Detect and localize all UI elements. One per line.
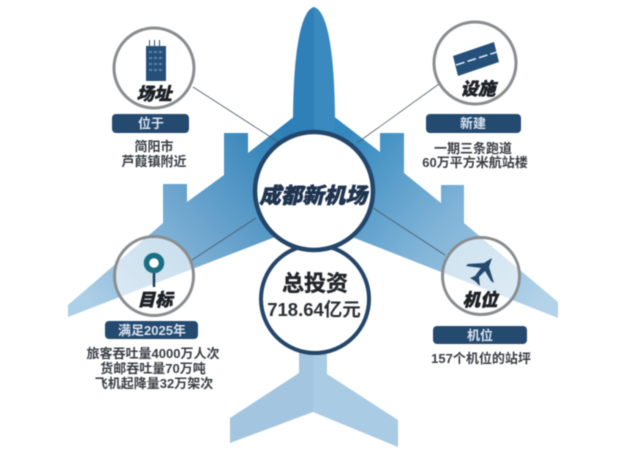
icon: location pin — [146, 256, 162, 287]
connector lines — [192, 84, 445, 260]
goal pill: 满足2025年 — [118, 323, 186, 338]
panel: goal — [87, 236, 219, 391]
goal text: 旅客吞吐量4000万人次 — [87, 346, 219, 361]
central title: 成都新机场 — [259, 184, 369, 208]
icon: plane — [466, 258, 494, 286]
investment heading: 总投资 — [282, 271, 348, 296]
facilities text: 60万平方米航站楼 — [422, 155, 528, 170]
stands pill: 机位 — [467, 328, 493, 343]
goal text: 货邮吞吐量70万吨 — [100, 361, 206, 376]
facilities text: 一期三条跑道 — [434, 141, 512, 156]
plane tail — [230, 340, 398, 447]
stands text: 157个机位的站坪 — [431, 351, 531, 366]
site text — [121, 139, 187, 169]
plane nose — [293, 7, 335, 180]
icon: runway — [453, 42, 499, 76]
facilities pill — [426, 114, 521, 133]
right wing with engines — [314, 115, 558, 318]
panel: facilities — [422, 22, 528, 170]
site text: 芦葭镇附近 — [121, 154, 187, 169]
goal pill — [105, 321, 198, 339]
goal text: 飞机起降量32万架次 — [95, 376, 213, 391]
central circle — [255, 132, 373, 250]
icon: building — [146, 40, 166, 81]
goal text — [87, 346, 219, 391]
panel: site — [112, 28, 194, 169]
facilities text — [422, 141, 528, 170]
left wing with engines — [68, 115, 314, 317]
facilities pill: 新建 — [460, 116, 486, 131]
investment amount: 718.64亿元 — [267, 299, 361, 320]
site label: 场址 — [136, 84, 174, 104]
panel: stands — [431, 238, 531, 366]
site text: 简阳市 — [134, 139, 174, 154]
site pill: 位于 — [138, 116, 164, 131]
site pill — [112, 114, 189, 133]
stands label: 机位 — [462, 290, 500, 310]
investment circle — [261, 245, 369, 353]
goal label: 目标 — [138, 290, 175, 310]
facilities label: 设施 — [460, 79, 498, 99]
